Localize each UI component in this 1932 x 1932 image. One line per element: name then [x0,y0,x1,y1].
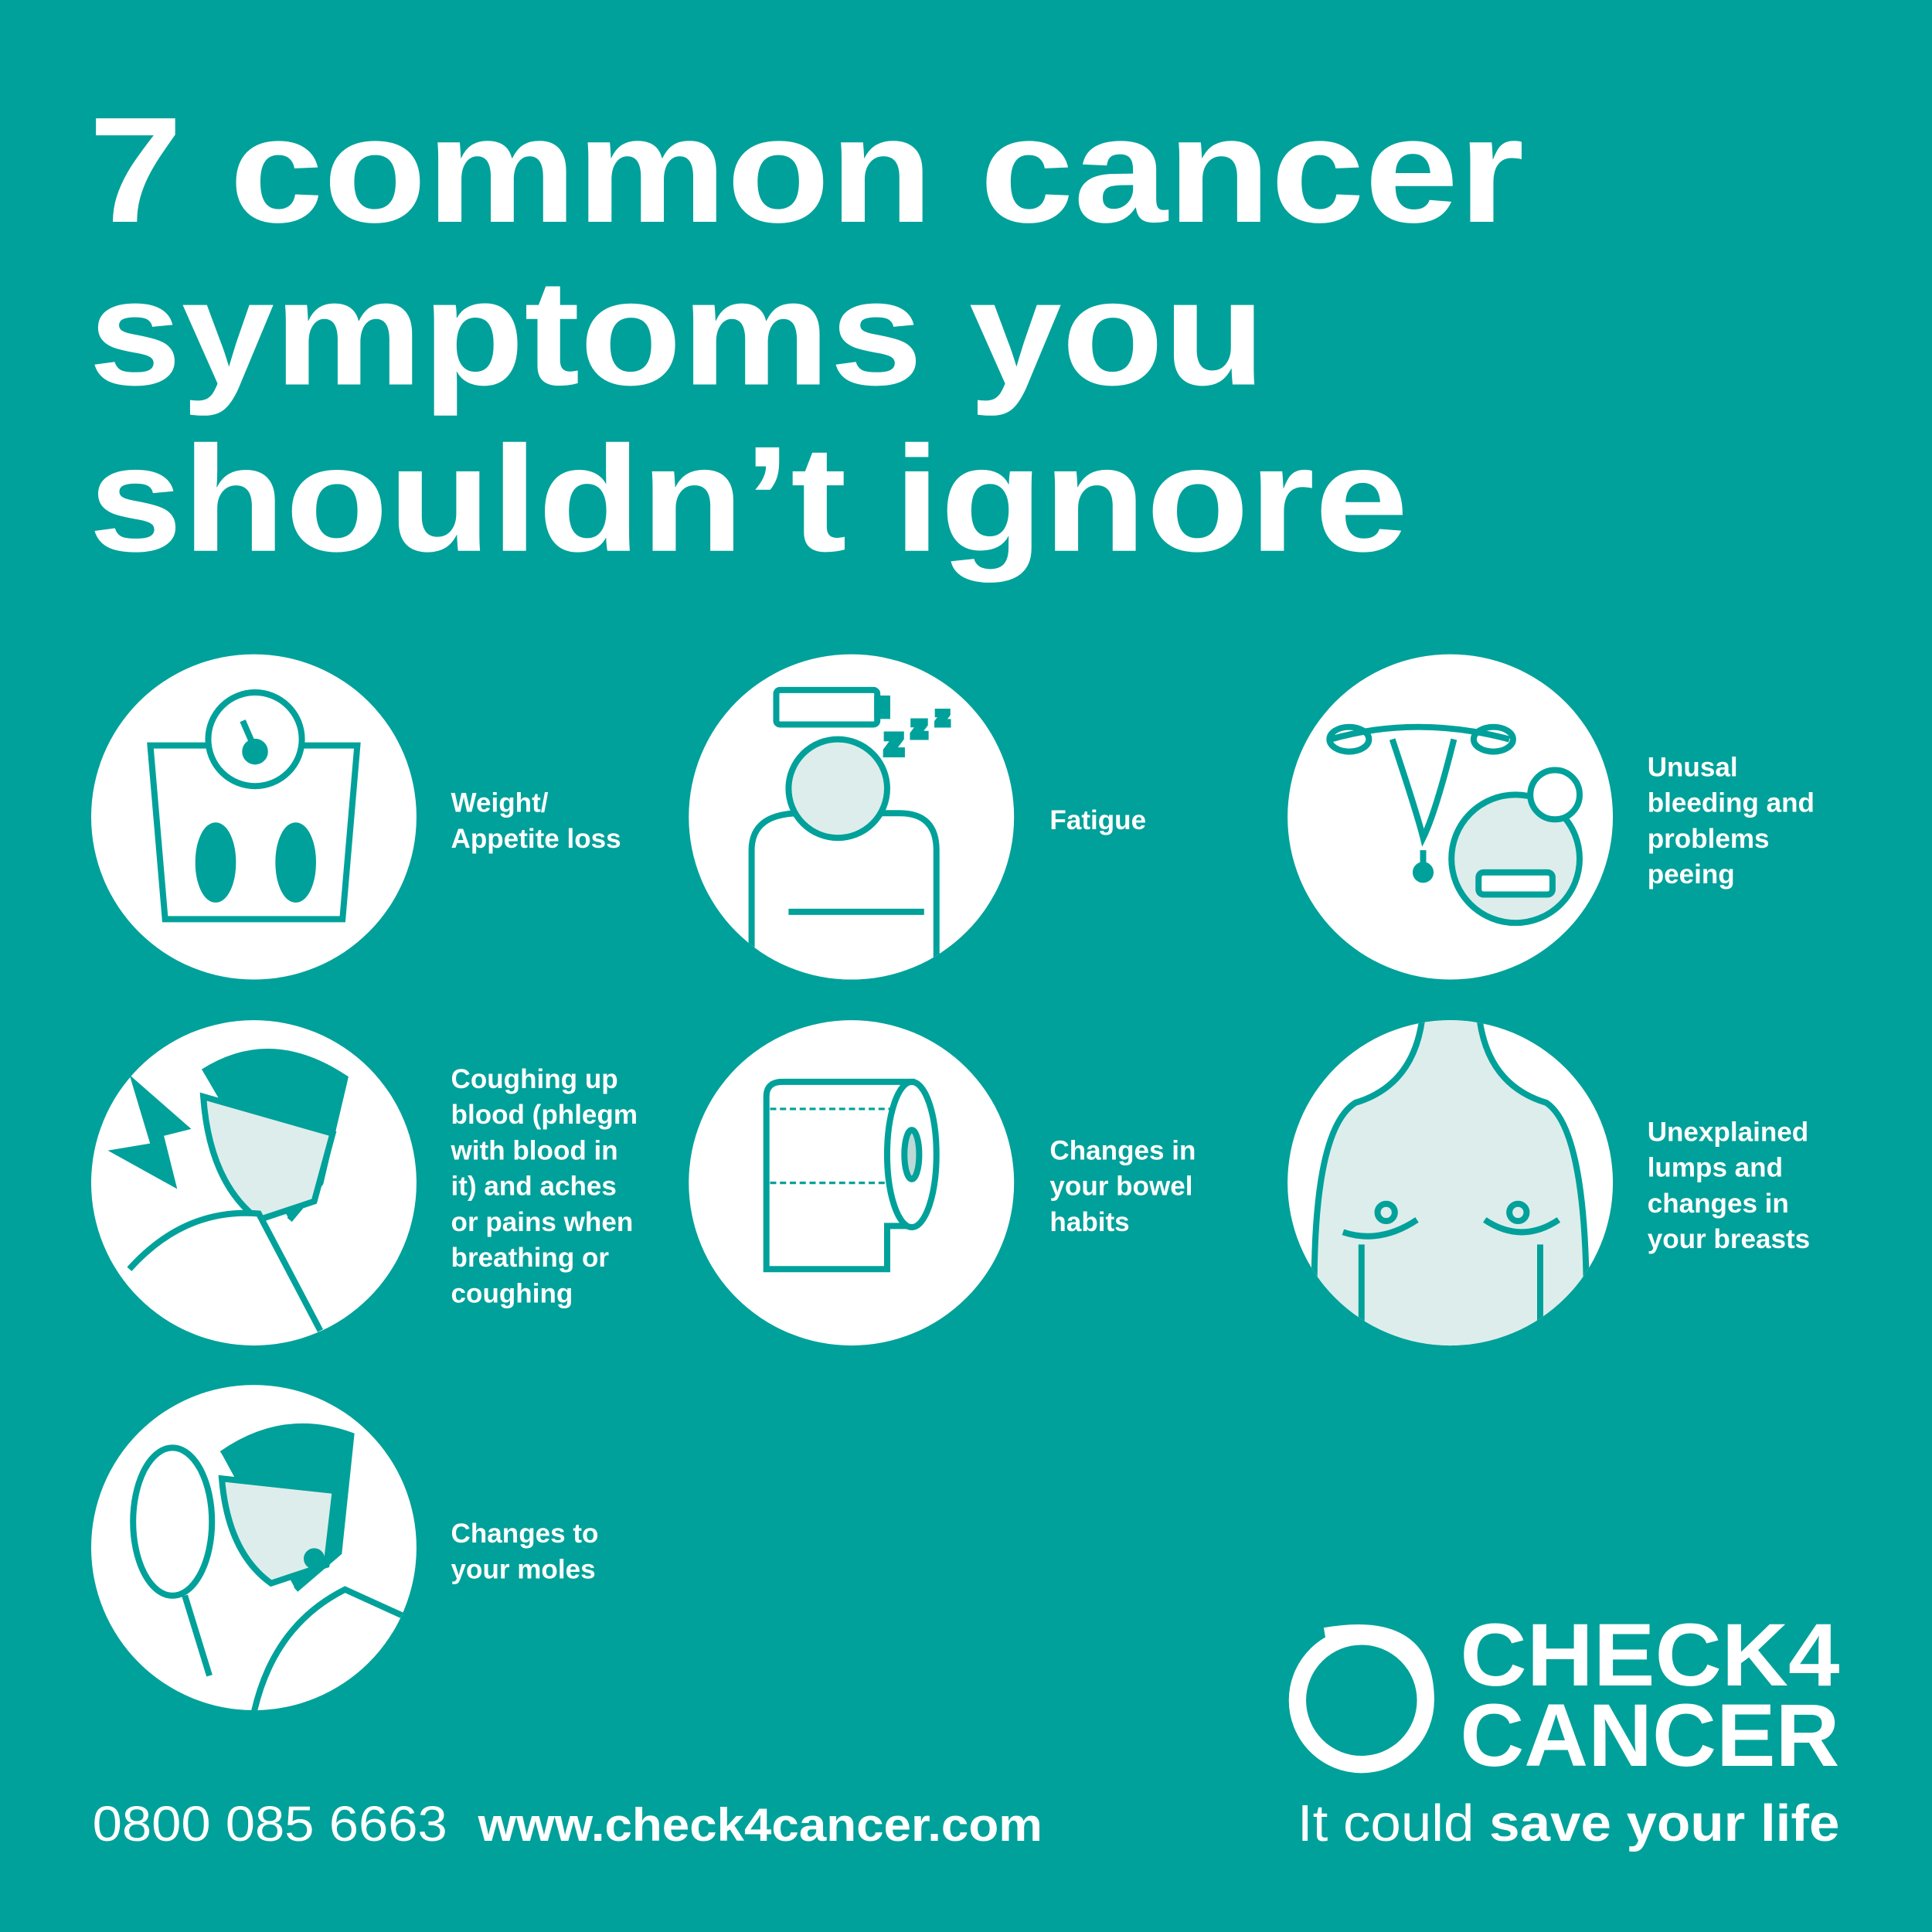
icon: tired person: z [912,710,927,743]
icon: torso [1287,1010,1613,1355]
icon: toilet roll [689,1020,1014,1345]
panel: coughing [91,1020,638,1345]
text: coughing label: or pains when [451,1207,633,1237]
text: logo wordmark [1460,1606,1840,1785]
icon: logo ring [1298,1629,1429,1764]
text: coughing label: it) and aches [451,1172,617,1202]
text: breasts label: lumps and [1648,1153,1783,1183]
text: weight label: Weight/ [451,788,549,818]
text: moles label: Changes to [451,1519,598,1549]
title: symptoms you [89,249,1265,417]
text: coughing label: coughing [451,1278,573,1308]
panel: moles [91,1385,598,1719]
text: bleeding label: peeing [1648,859,1735,889]
footer: website: www.check4cancer.com [478,1798,1043,1851]
icon: man with mirror [91,1385,417,1719]
text: moles label: your moles [451,1554,596,1584]
panel: fatigue [689,655,1146,992]
text: coughing label: with blood in [451,1135,618,1165]
text: bleeding label: Unusal [1648,752,1738,782]
text: coughing label: blood (phlegm [451,1100,638,1130]
panel: bowel [689,1020,1196,1345]
tagline: It could save your life [1298,1794,1839,1852]
title: shouldn’t ignore [89,416,1408,583]
text: weight label: Appetite loss [451,824,621,854]
footer: phone: 0800 085 6663 [93,1796,447,1852]
text: breasts label: changes in [1648,1189,1789,1219]
text: bleeding label: bleeding and [1648,788,1815,818]
text: bowel label: your bowel [1049,1172,1192,1202]
text: bowel label: habits [1049,1207,1130,1237]
text: coughing label: Coughing up [451,1064,618,1094]
text: breasts label: your breasts [1648,1224,1810,1254]
text: logo wordmark: CHECK4 [1460,1606,1840,1705]
icon: tired person: z [885,722,903,763]
text: coughing label: breathing or [451,1243,609,1273]
icon: tired person: z [937,702,949,730]
text: fatigue label: Fatigue [1049,805,1146,835]
text: bleeding label: problems [1648,824,1770,854]
text: logo wordmark: CANCER [1460,1686,1839,1785]
title [89,87,1524,583]
text: breasts label: Unexplained [1648,1117,1808,1147]
panel: unusual bleeding [1287,655,1815,980]
title: 7 common cancer [89,87,1524,254]
panel: weight loss [91,655,621,980]
icon: uterus and face [1287,655,1613,980]
text: bowel label: Changes in [1049,1135,1196,1165]
panel: breasts [1287,1010,1810,1355]
logo [1298,1606,1840,1785]
icon: tired person [689,655,1014,992]
icon: coughing man [91,1020,417,1345]
icon: scales [91,655,417,980]
